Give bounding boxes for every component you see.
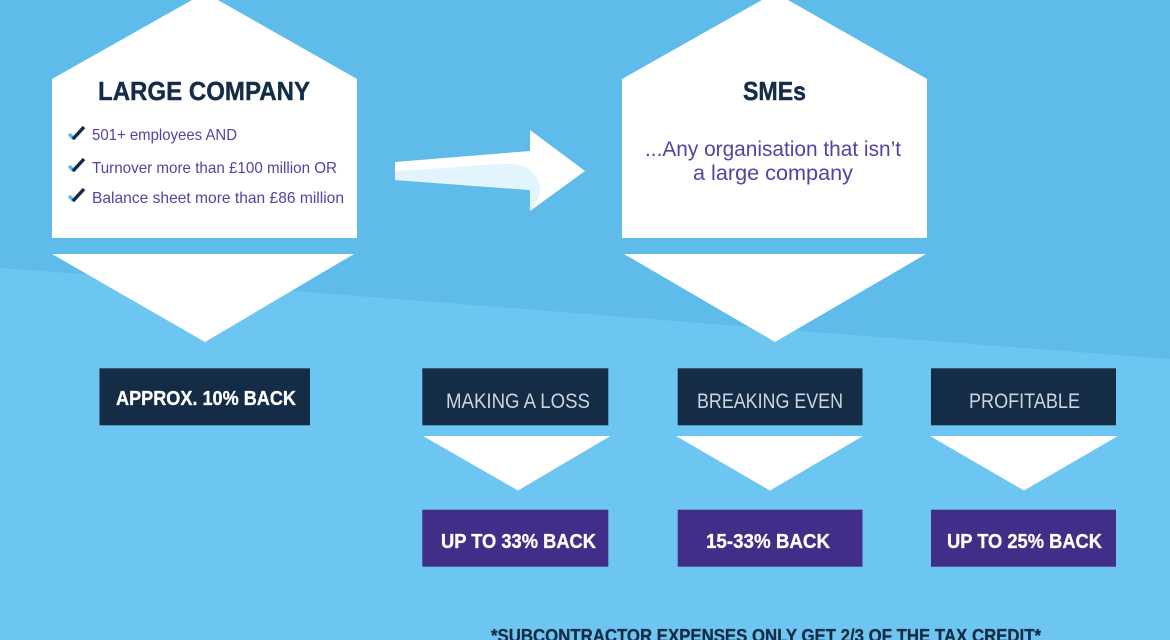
box: up to 33% back <box>422 510 608 567</box>
panel shape: large company upper <box>52 0 357 238</box>
heading: large company: LARGE COMPANY <box>98 76 310 106</box>
icon: check 2 <box>69 159 84 171</box>
heading: SMEs: SMEs <box>743 76 806 106</box>
box: 15-33% back: 15-33% BACK <box>706 531 831 553</box>
icon: check 3 <box>69 189 84 201</box>
box: up to 25% back: UP TO 25% BACK <box>947 531 1103 553</box>
box: breaking even <box>678 368 862 425</box>
SMEs description: a large company <box>693 162 854 185</box>
box: up to 33% back: UP TO 33% BACK <box>441 531 597 553</box>
arrow down <box>930 436 1118 490</box>
box: making a loss: MAKING A LOSS <box>446 390 590 413</box>
criterion: employees: 501+ employees AND <box>92 127 237 144</box>
criteria list <box>69 127 344 207</box>
panel: large company <box>52 0 357 342</box>
box: breaking even: BREAKING EVEN <box>697 390 843 413</box>
column: making a loss <box>422 368 610 567</box>
SMEs description <box>645 138 901 185</box>
box: profitable: PROFITABLE <box>969 390 1080 413</box>
column: profitable <box>930 368 1118 567</box>
arrow down <box>423 436 610 490</box>
column: breaking even <box>676 368 863 567</box>
panel: SMEs <box>622 0 927 342</box>
criterion: balance sheet: Balance sheet more than £86 million <box>92 190 344 207</box>
box: up to 25% back <box>931 510 1116 567</box>
panel shape: SMEs upper <box>622 0 927 238</box>
SMEs description: ...Any organisation that isn’t <box>645 138 901 161</box>
arrow: large company to SMEs <box>395 130 585 211</box>
box: making a loss <box>422 368 608 425</box>
panel shape: large company lower <box>52 254 354 342</box>
criterion: turnover: Turnover more than £100 million OR <box>92 160 337 177</box>
box: profitable <box>931 368 1116 425</box>
panel shape: SMEs lower <box>624 254 926 342</box>
box: 15-33% back <box>678 510 862 567</box>
box: approx 10% back <box>100 368 310 425</box>
arrow down <box>676 436 863 490</box>
box: approx 10% back: APPROX. 10% BACK <box>116 388 297 410</box>
icon: check 1 <box>69 127 84 139</box>
